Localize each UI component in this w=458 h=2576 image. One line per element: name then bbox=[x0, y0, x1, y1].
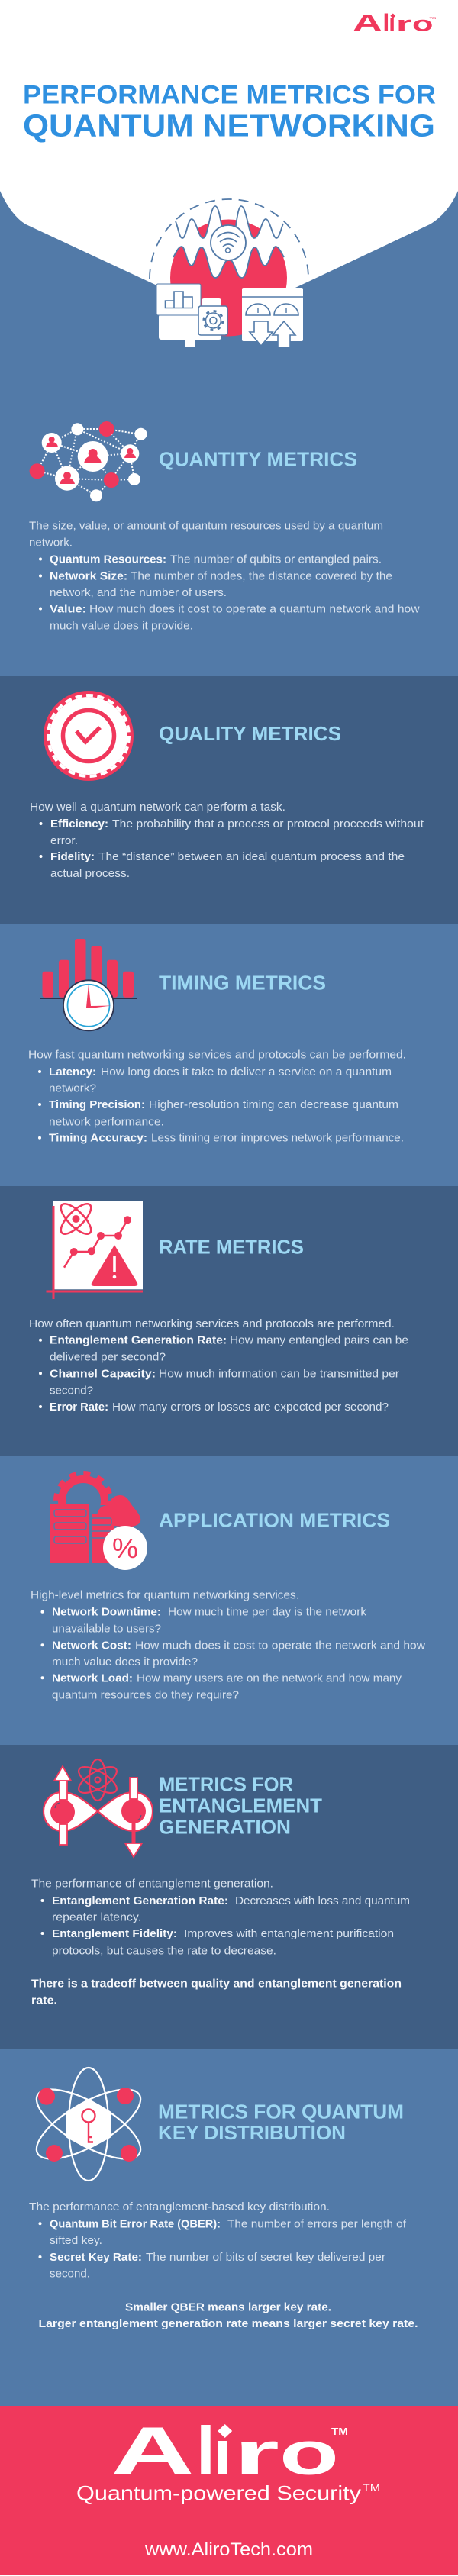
text block: application metrics: High-level metrics for quantum networking services. bbox=[31, 1589, 299, 1602]
text block: timing metrics bbox=[28, 1049, 406, 1145]
callout: quality tradeoff: rate. bbox=[31, 1994, 57, 2007]
text block: quality metrics: actual process. bbox=[50, 867, 130, 880]
text block: timing metrics: How long does it take to deliver a service on a quantum bbox=[101, 1066, 392, 1078]
heading: metrics for quantum key distribution: METRICS FOR QUANTUM bbox=[158, 2100, 404, 2123]
text block: timing metrics: Timing Accuracy: bbox=[49, 1132, 147, 1145]
text block: quantity metrics: Value: bbox=[50, 602, 86, 615]
text block: quantity metrics: The number of qubits or entangled pairs. bbox=[170, 553, 382, 566]
text block: rate metrics: delivered per second? bbox=[50, 1351, 166, 1364]
heading: quantity metrics: QUANTITY METRICS bbox=[159, 448, 357, 471]
icon: application servers, gear, cloud and percent bbox=[50, 1473, 147, 1570]
text block: application metrics: Network Load: bbox=[52, 1672, 133, 1685]
callout: quality tradeoff: There is a tradeoff between quality and entanglement generation bbox=[31, 1978, 402, 1991]
title: QUANTUM NETWORKING bbox=[23, 108, 435, 143]
text block: quality metrics bbox=[30, 801, 424, 880]
text block: application metrics: How much does it cost to operate the network and how bbox=[135, 1639, 425, 1652]
heading: metrics for quantum key distribution bbox=[158, 2100, 404, 2144]
text block: rate metrics bbox=[29, 1317, 408, 1414]
panel: application metrics background bbox=[0, 1456, 458, 1745]
text block: quantum key distribution: The number of errors per length of bbox=[227, 2217, 407, 2230]
text block: application metrics: unavailable to users? bbox=[52, 1622, 161, 1635]
heading: metrics for entanglement generation: ENTANGLEMENT bbox=[159, 1794, 322, 1817]
tagline: Quantum-powered Security bbox=[76, 2482, 362, 2505]
panel: quantity metrics background bbox=[0, 0, 458, 676]
text block: quality metrics: error. bbox=[50, 834, 78, 847]
callout: key rate takeaways bbox=[38, 2300, 418, 2330]
text block: application metrics bbox=[31, 1589, 425, 1702]
callout: key rate takeaways: Smaller QBER means larger key rate. bbox=[125, 2300, 331, 2313]
panel: rate metrics background bbox=[0, 1186, 458, 1456]
title bbox=[23, 81, 436, 143]
logo: Aliro top: TM bbox=[429, 16, 437, 20]
icon: atom with key bbox=[27, 2068, 150, 2181]
icon: rate chart with warning bbox=[46, 1200, 143, 1299]
text block: application metrics: How many users are on the network and how many bbox=[137, 1672, 402, 1685]
logo: Aliro top: r bbox=[396, 12, 412, 36]
text block: timing metrics: Latency: bbox=[49, 1066, 96, 1078]
heading: timing metrics: TIMING METRICS bbox=[159, 972, 326, 995]
logo: Aliro top bbox=[353, 14, 436, 31]
heading: application metrics: APPLICATION METRICS bbox=[159, 1509, 390, 1532]
text block: timing metrics: Less timing error improves network performance. bbox=[151, 1132, 404, 1145]
logo: Aliro footer: r bbox=[234, 2420, 279, 2487]
logo: Aliro footer: i bbox=[213, 2413, 232, 2489]
icon: entangled spins and atom bbox=[44, 1759, 153, 1857]
text block: entanglement generation: Decreases with loss and quantum bbox=[235, 1894, 410, 1907]
text block: application metrics: Network Downtime: bbox=[52, 1606, 161, 1619]
text block: application metrics: much value does it provide? bbox=[52, 1656, 198, 1668]
text block: entanglement generation: The performance of entanglement generation. bbox=[31, 1878, 273, 1891]
text block: rate metrics: How much information can be transmitted per bbox=[159, 1367, 399, 1380]
icon: quality badge bbox=[44, 691, 134, 781]
heading: rate metrics: RATE METRICS bbox=[159, 1235, 304, 1258]
text block: quantity metrics: network. bbox=[29, 537, 73, 550]
panel: white header shape bbox=[0, 0, 458, 319]
text block: entanglement generation: Improves with entanglement purification bbox=[184, 1927, 394, 1940]
text block: quantity metrics: The size, value, or amount of quantum resources used by a quantum bbox=[29, 519, 383, 532]
panel: timing metrics background bbox=[0, 924, 458, 1186]
text block: quantity metrics: network, and the number of users. bbox=[50, 586, 227, 599]
logo: Aliro footer bbox=[113, 2424, 347, 2474]
heading: metrics for quantum key distribution: KEY DISTRIBUTION bbox=[158, 2121, 346, 2144]
tagline: TM bbox=[363, 2481, 380, 2494]
text block: rate metrics: Error Rate: bbox=[50, 1401, 108, 1414]
text block: quantum key distribution: The performance of entanglement-based key distribution. bbox=[29, 2200, 330, 2213]
text block: quality metrics: Efficiency: bbox=[50, 817, 108, 830]
text block: entanglement generation: repeater latency. bbox=[52, 1911, 141, 1924]
panel: footer bbox=[0, 2406, 458, 2575]
text block: timing metrics: Higher-resolution timing can decrease quantum bbox=[149, 1098, 398, 1111]
icon text: percent sign: % bbox=[112, 1533, 138, 1564]
heading: quality metrics: QUALITY METRICS bbox=[159, 722, 341, 745]
heading: metrics for entanglement generation: METRICS FOR bbox=[159, 1773, 293, 1796]
panel: quantum key distribution background bbox=[0, 2049, 458, 2406]
text block: quantum key distribution: sifted key. bbox=[50, 2234, 102, 2247]
text block: entanglement generation bbox=[31, 1878, 410, 2007]
icon: network of users bbox=[30, 421, 147, 501]
heading: metrics for entanglement generation bbox=[159, 1773, 322, 1839]
text block: entanglement generation: Entanglement Generation Rate: bbox=[52, 1894, 228, 1907]
logo: Aliro footer: TM bbox=[331, 2426, 348, 2437]
text block: application metrics: How much time per day is the network bbox=[168, 1606, 366, 1619]
text block: entanglement generation: protocols, but causes the rate to decrease. bbox=[52, 1944, 276, 1957]
text block: quality metrics: The “distance” between an ideal quantum process and the bbox=[98, 850, 405, 863]
text block: quantity metrics: Network Size: bbox=[50, 569, 127, 582]
text block: rate metrics: How often quantum networking services and protocols are performed. bbox=[29, 1317, 395, 1330]
text block: timing metrics: How fast quantum networking services and protocols can be performed. bbox=[28, 1049, 406, 1062]
text block: quality metrics: The probability that a process or protocol proceeds without bbox=[112, 817, 424, 830]
icon: timing bars and clock bbox=[40, 939, 137, 1030]
logo: Aliro footer: l bbox=[196, 2413, 215, 2489]
title: PERFORMANCE METRICS FOR bbox=[23, 81, 436, 110]
callout: key rate takeaways: Larger entanglement generation rate means larger secret key rate. bbox=[38, 2317, 418, 2330]
text block: quantity metrics: The number of nodes, the distance covered by the bbox=[131, 569, 392, 582]
icon: performance metrics hero bbox=[150, 199, 308, 347]
text block: quantum key distribution: Secret Key Rate: bbox=[50, 2251, 142, 2264]
website url: www.AliroTech.com bbox=[144, 2539, 313, 2560]
text block: timing metrics: Timing Precision: bbox=[49, 1098, 145, 1111]
logo: Aliro top: i bbox=[389, 10, 395, 37]
text block: rate metrics: How many errors or losses are expected per second? bbox=[112, 1401, 389, 1414]
text block: quantum key distribution bbox=[29, 2200, 418, 2330]
panel: entanglement generation background bbox=[0, 1745, 458, 2049]
panel: quality metrics background bbox=[0, 676, 458, 924]
text block: quantum key distribution: second. bbox=[50, 2268, 90, 2281]
text block: quantity metrics: How much does it cost to operate a quantum network and how bbox=[89, 602, 420, 615]
logo: Aliro top: l bbox=[383, 10, 389, 37]
text block: quantity metrics: much value does it provide. bbox=[50, 620, 193, 633]
text block: timing metrics: network? bbox=[49, 1082, 96, 1095]
text block: application metrics: quantum resources do they require? bbox=[52, 1689, 239, 1702]
text block: quantum key distribution: Quantum Bit Error Rate (QBER): bbox=[50, 2217, 221, 2230]
text block: rate metrics: Channel Capacity: bbox=[50, 1367, 156, 1380]
text block: quality metrics: How well a quantum network can perform a task. bbox=[30, 801, 285, 814]
text block: rate metrics: How many entangled pairs can be bbox=[230, 1334, 408, 1347]
text block: quantum key distribution: The number of bits of secret key delivered per bbox=[146, 2251, 385, 2264]
text block: quality metrics: Fidelity: bbox=[50, 850, 95, 863]
text block: rate metrics: second? bbox=[50, 1384, 93, 1397]
text block: quantity metrics bbox=[29, 519, 420, 633]
text block: application metrics: Network Cost: bbox=[52, 1639, 131, 1652]
text block: quantity metrics: Quantum Resources: bbox=[50, 553, 166, 566]
logo: Aliro footer: A bbox=[111, 2413, 195, 2489]
text block: entanglement generation: Entanglement Fidelity: bbox=[52, 1927, 177, 1940]
heading: metrics for entanglement generation: GENERATION bbox=[159, 1816, 291, 1839]
logo: Aliro footer: o bbox=[279, 2420, 339, 2487]
text block: rate metrics: Entanglement Generation Rate: bbox=[50, 1334, 227, 1347]
callout: quality tradeoff bbox=[31, 1978, 402, 2007]
logo: Aliro top: o bbox=[412, 12, 434, 36]
logo: Aliro top: A bbox=[353, 10, 382, 37]
text block: timing metrics: network performance. bbox=[49, 1115, 164, 1128]
